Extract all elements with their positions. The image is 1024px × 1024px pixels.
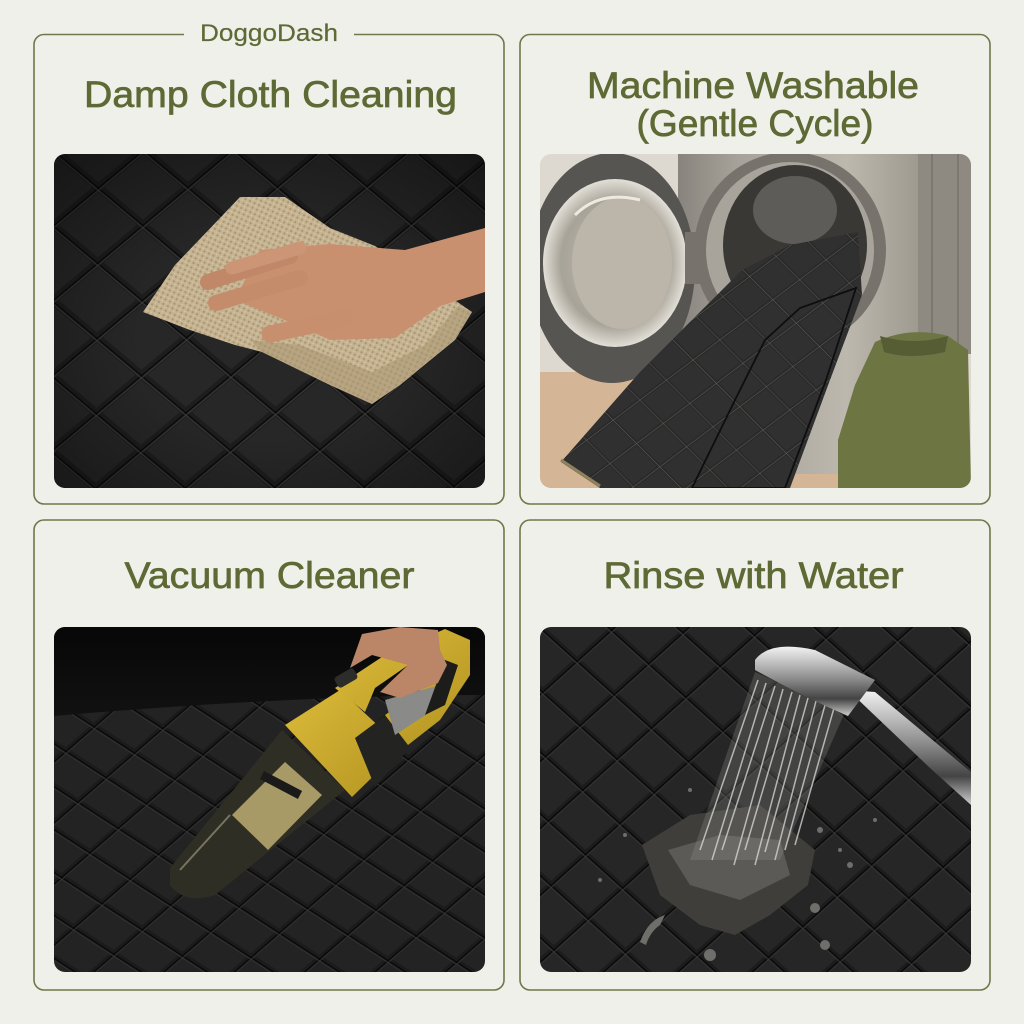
heading: machine washable (gentle cycle): Machine Washable (587, 65, 919, 106)
panel frame with brand gap (34, 34, 504, 504)
heading: machine washable (gentle cycle): (Gentle Cycle) (636, 103, 874, 144)
photo: shower head rinsing mat (540, 627, 971, 972)
vacuum yellow body (285, 691, 376, 797)
machine drum (696, 154, 886, 326)
shower handle (848, 690, 971, 805)
water stream (690, 672, 845, 860)
floor (540, 372, 840, 488)
panel frame (34, 520, 504, 990)
shower head (755, 647, 875, 716)
brand name: DoggoDash (200, 20, 338, 47)
washing machine body (678, 154, 918, 474)
panel: damp cloth cleaning (34, 20, 504, 504)
panel: machine washable (520, 34, 990, 504)
panel: rinse with water (520, 520, 990, 990)
panel: vacuum cleaner (34, 520, 504, 990)
heading: rinse with water: Rinse with Water (604, 555, 904, 596)
panel frame (520, 520, 990, 990)
photo: handheld vacuum on mat (54, 627, 485, 972)
heading: damp cloth cleaning: Damp Cloth Cleaning (84, 74, 457, 115)
water droplets (598, 788, 877, 961)
green storage bag (838, 332, 971, 488)
open door (529, 153, 695, 383)
photo: hand wiping mat with cloth (54, 154, 485, 488)
photo: quilted mat coming out of washing machine (529, 152, 971, 488)
heading: machine washable (gentle cycle) (587, 65, 919, 144)
water puddle (642, 805, 815, 935)
mat (561, 232, 862, 488)
cloth (143, 197, 472, 404)
hand on handle (350, 627, 447, 698)
vacuum handle (335, 629, 470, 745)
hand: fingers (208, 248, 345, 334)
vacuum nozzle (170, 730, 345, 898)
heading: vacuum cleaner: Vacuum Cleaner (124, 555, 414, 596)
panel frame (520, 34, 990, 504)
hand: palm and wrist (235, 228, 485, 340)
